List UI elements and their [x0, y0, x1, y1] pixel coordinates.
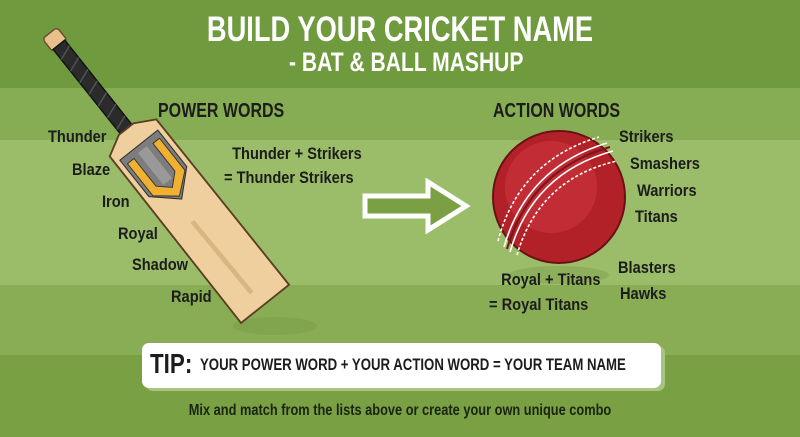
- example: thunder strikers: Thunder + Strikers: [232, 144, 362, 163]
- tip box: [142, 343, 661, 388]
- title: BUILD YOUR CRICKET NAME: [207, 10, 593, 49]
- example: royal titans: [489, 270, 600, 314]
- icon: cricket ball: [492, 130, 626, 284]
- text: Warriors: [637, 181, 697, 200]
- text: Royal: [118, 224, 158, 243]
- text: Shadow: [132, 255, 188, 274]
- text: Blasters: [618, 258, 676, 277]
- footer note: Mix and match from the lists above or create your own unique combo: [189, 402, 611, 419]
- text: Strikers: [619, 127, 673, 146]
- tip text: YOUR POWER WORD + YOUR ACTION WORD = YOUR TEAM NAME: [200, 356, 626, 374]
- example: thunder strikers: [224, 144, 362, 187]
- text: Thunder: [48, 127, 106, 146]
- heading: power words: POWER WORDS: [158, 100, 284, 122]
- text: Hawks: [620, 284, 666, 303]
- arrow: [362, 178, 470, 234]
- text: Iron: [102, 192, 130, 211]
- text: Rapid: [171, 287, 212, 306]
- text: Blaze: [72, 160, 110, 179]
- title: [207, 10, 593, 77]
- example: royal titans: = Royal Titans: [489, 295, 588, 314]
- tip label: TIP:: [150, 348, 192, 379]
- example: thunder strikers: = Thunder Strikers: [224, 168, 354, 187]
- text: Smashers: [630, 154, 700, 173]
- text: Titans: [635, 207, 678, 226]
- heading: action words: ACTION WORDS: [493, 100, 620, 122]
- example: royal titans: Royal + Titans: [501, 270, 600, 289]
- title: - BAT & BALL MASHUP: [289, 47, 523, 77]
- list: power words: [48, 127, 212, 306]
- list: action words: [618, 127, 700, 303]
